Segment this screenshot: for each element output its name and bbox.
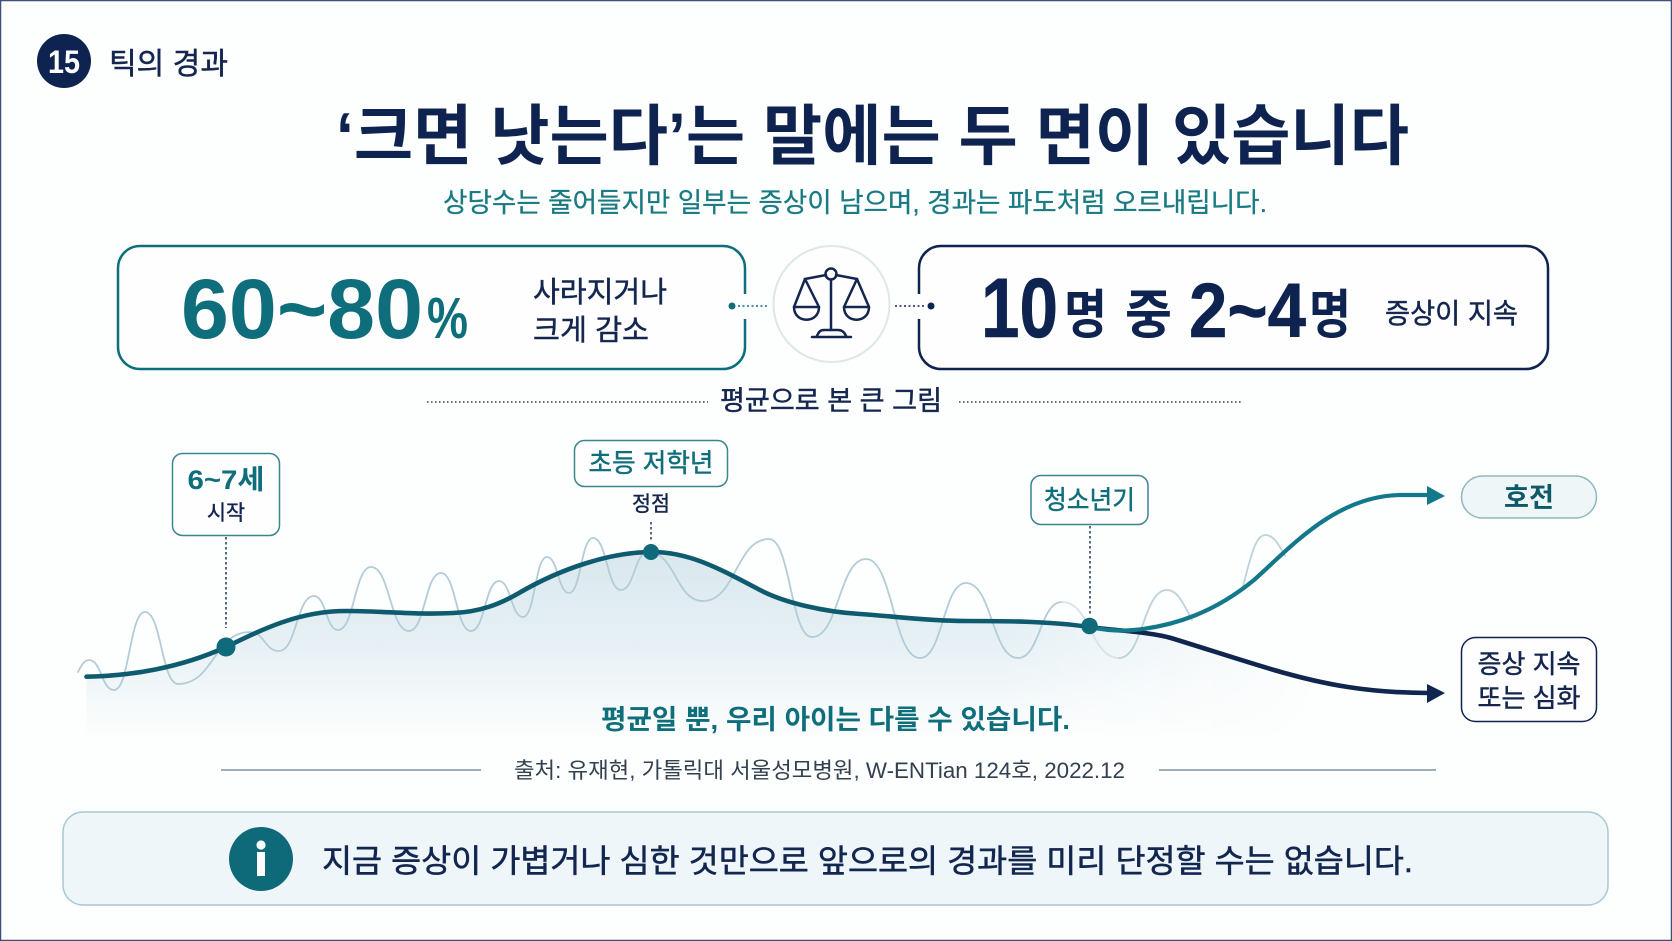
title: ‘크면 낫는다’는 말에는 두 면이 있습니다 [336, 99, 1409, 173]
icon: info [229, 827, 293, 891]
chart caption: 평균일 뿐, 우리 아이는 다를 수 있습니다. [601, 705, 1070, 735]
section divider label: 평균으로 본 큰 그림 [720, 386, 942, 416]
average curve [86, 552, 1089, 677]
description: improve: 크게 감소 [533, 315, 649, 347]
marker: age 6~7 start: 시작 [207, 502, 245, 525]
outcome label: persistent or worse: 또는 심화 [1478, 683, 1581, 713]
outcome label: improvement: 호전 [1504, 483, 1554, 513]
callout text: 지금 증상이 가볍거나 심한 것만으로 앞으로의 경과를 미리 단정할 수는 없습니다. [322, 843, 1413, 879]
marker: lower elementary peak: 정점 [632, 493, 670, 516]
marker: lower elementary peak [574, 440, 728, 560]
marker: age 6~7 start [172, 454, 280, 656]
source line: 출처: 유재현, 가톨릭대 서울성모병원, W-ENTian 124호, 2022.12 [514, 758, 1125, 783]
section number badge [37, 34, 91, 88]
marker: lower elementary peak: 초등 저학년 [588, 448, 714, 478]
description: improve [533, 277, 667, 347]
marker: adolescence [1031, 476, 1148, 634]
icon: balance scale [774, 246, 890, 362]
connector right [895, 302, 934, 310]
marker: age 6~7 start: 6~7세 [188, 465, 264, 495]
marker: adolescence: 청소년기 [1044, 485, 1135, 515]
outcome label: improvement [1462, 476, 1596, 518]
subtitle: 상당수는 줄어들지만 일부는 증상이 남으며, 경과는 파도처럼 오르내립니다. [443, 188, 1267, 218]
description: improve: 사라지거나 [533, 277, 667, 309]
panel: 2~4 of 10 persist [914, 246, 1548, 369]
section heading: 틱의 경과 [109, 48, 228, 81]
outcome label: persistent or worse [1462, 638, 1596, 722]
chart: symptom course [77, 486, 1445, 704]
big number 10 of 2~4: 2~4 [1189, 268, 1306, 354]
section number badge: 15 [48, 44, 80, 80]
area under average curve [86, 554, 1194, 704]
connector left [728, 302, 768, 310]
description: persist: 증상이 지속 [1385, 298, 1518, 329]
big number 10 of 2~4: 명 [1064, 286, 1107, 345]
arrow: persistent or worse [1089, 627, 1445, 703]
big number 10 of 2~4: 중 [1125, 286, 1172, 345]
arrow: improvement [1089, 486, 1445, 631]
big number 60~80%: 60~80 [181, 262, 423, 356]
outcome label: persistent or worse: 증상 지속 [1478, 649, 1580, 679]
big number 60~80%: % [427, 286, 468, 351]
callout: note [63, 812, 1608, 905]
big number 10 of 2~4: 명 [1309, 286, 1351, 345]
big number 10 of 2~4 [981, 261, 1351, 355]
fluctuating individual wave [78, 535, 1285, 690]
big number 10 of 2~4: 10 [981, 261, 1058, 355]
panel: 60~80% improve [118, 246, 750, 369]
